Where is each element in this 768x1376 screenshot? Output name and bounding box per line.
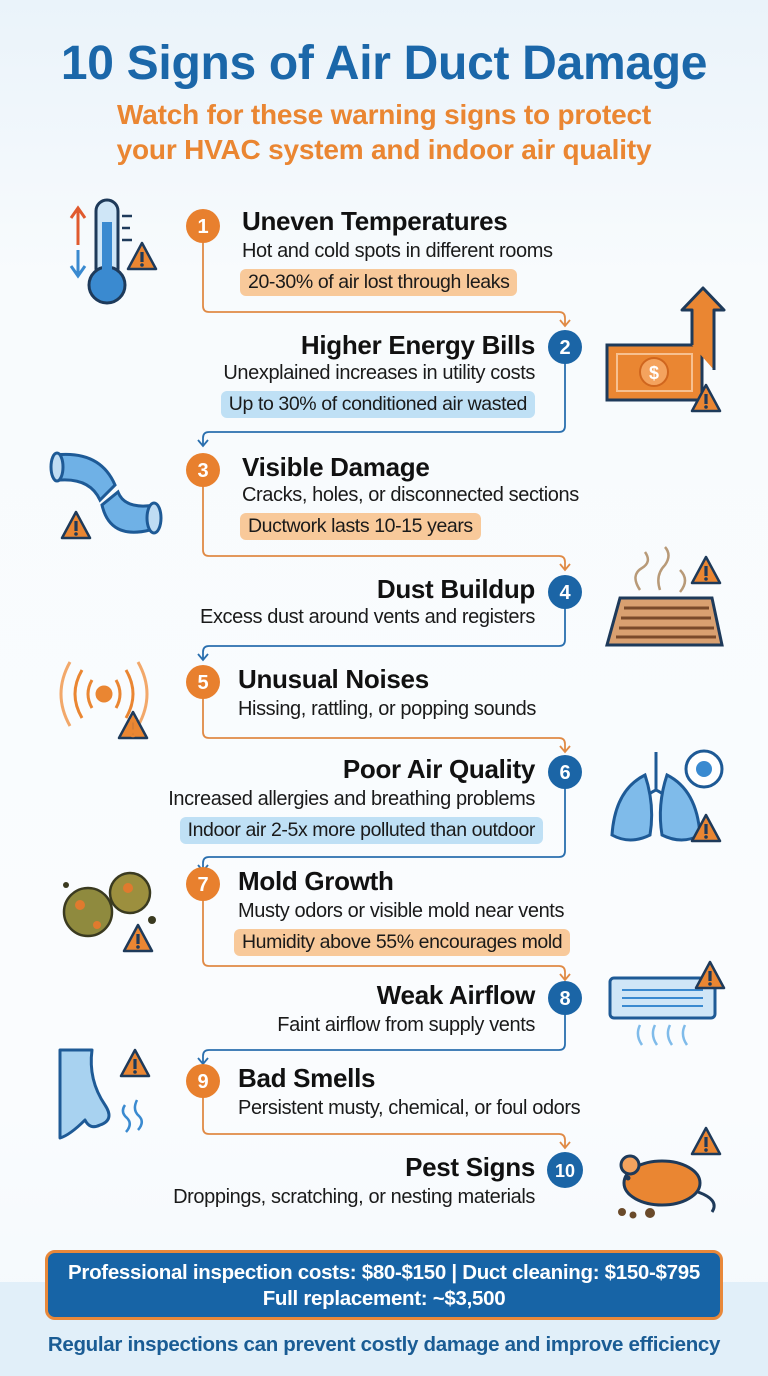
item 4: Excess dust around vents and registers [200, 606, 535, 628]
icon: dusty vent [607, 547, 722, 645]
item 8: Faint airflow from supply vents [277, 1014, 535, 1036]
number badges: 6 [559, 762, 571, 784]
number badges: 5 [197, 672, 209, 694]
icon: money with arrow: $ [649, 363, 659, 383]
cost callout box: Full replacement: ~$3,500 [263, 1287, 505, 1310]
item 8 [277, 980, 536, 1036]
item 8: Weak Airflow [377, 980, 535, 1010]
item 2 [221, 330, 535, 418]
item 6: Indoor air 2-5x more polluted than outdoor [188, 819, 535, 841]
item 5 [238, 664, 536, 720]
number badges: 7 [197, 874, 209, 896]
item 1: 20-30% of air lost through leaks [248, 271, 509, 293]
cost callout box [45, 1250, 723, 1320]
number badges: 3 [197, 460, 209, 482]
icon: sound waves [61, 662, 147, 738]
footer note: Regular inspections can prevent costly damage and improve efficiency [48, 1333, 720, 1356]
item 6: Poor Air Quality [343, 754, 535, 784]
icon: money with arrow [607, 288, 724, 411]
number badges: 8 [559, 988, 571, 1010]
item 2: Unexplained increases in utility costs [223, 362, 535, 384]
number badges: 2 [559, 337, 571, 359]
item 6: Increased allergies and breathing problems [168, 788, 535, 810]
item 7: Mold Growth [238, 866, 394, 896]
item 2: Higher Energy Bills [301, 330, 535, 360]
number badges [186, 209, 583, 1188]
connectors [198, 240, 570, 1148]
item 2: Up to 30% of conditioned air wasted [229, 393, 527, 415]
item 5: Hissing, rattling, or popping sounds [238, 698, 536, 720]
item 1: Hot and cold spots in different rooms [242, 240, 553, 262]
number badges: 1 [197, 216, 209, 238]
number badges: 4 [559, 582, 571, 604]
item 4: Dust Buildup [377, 574, 535, 604]
subtitle [116, 99, 652, 165]
subtitle: your HVAC system and indoor air quality [117, 134, 651, 165]
icon: broken duct [51, 453, 161, 538]
item 7: Humidity above 55% encourages mold [242, 931, 562, 953]
item 9 [238, 1063, 580, 1119]
item 7 [234, 866, 570, 956]
item 6 [168, 754, 543, 844]
title: 10 Signs of Air Duct Damage [61, 37, 707, 90]
subtitle: Watch for these warning signs to protect [117, 99, 651, 130]
item 10: Pest Signs [405, 1152, 535, 1182]
item 3: Ductwork lasts 10-15 years [248, 515, 473, 537]
item 7: Musty odors or visible mold near vents [238, 900, 564, 922]
item 9: Persistent musty, chemical, or foul odors [238, 1097, 580, 1119]
item 4 [200, 574, 535, 628]
item 10 [173, 1152, 535, 1208]
item 1: Uneven Temperatures [242, 206, 507, 236]
icon: mouse [618, 1128, 720, 1218]
item 10: Droppings, scratching, or nesting materials [173, 1186, 535, 1208]
number badges: 9 [197, 1071, 209, 1093]
item 3 [240, 452, 579, 540]
item 3: Visible Damage [242, 452, 430, 482]
icon: nose [60, 1050, 149, 1138]
icon: thermometer [71, 200, 156, 303]
item 5: Unusual Noises [238, 664, 429, 694]
item 9: Bad Smells [238, 1063, 375, 1093]
number badges: 10 [555, 1161, 575, 1181]
item 3: Cracks, holes, or disconnected sections [242, 484, 579, 506]
item 1 [240, 206, 553, 296]
icon: mold [63, 873, 156, 951]
icon: AC unit [610, 962, 724, 1045]
cost callout box: Professional inspection costs: $80-$150 | Duct cleaning: $150-$795 [68, 1261, 700, 1284]
icon: lungs [612, 751, 722, 841]
